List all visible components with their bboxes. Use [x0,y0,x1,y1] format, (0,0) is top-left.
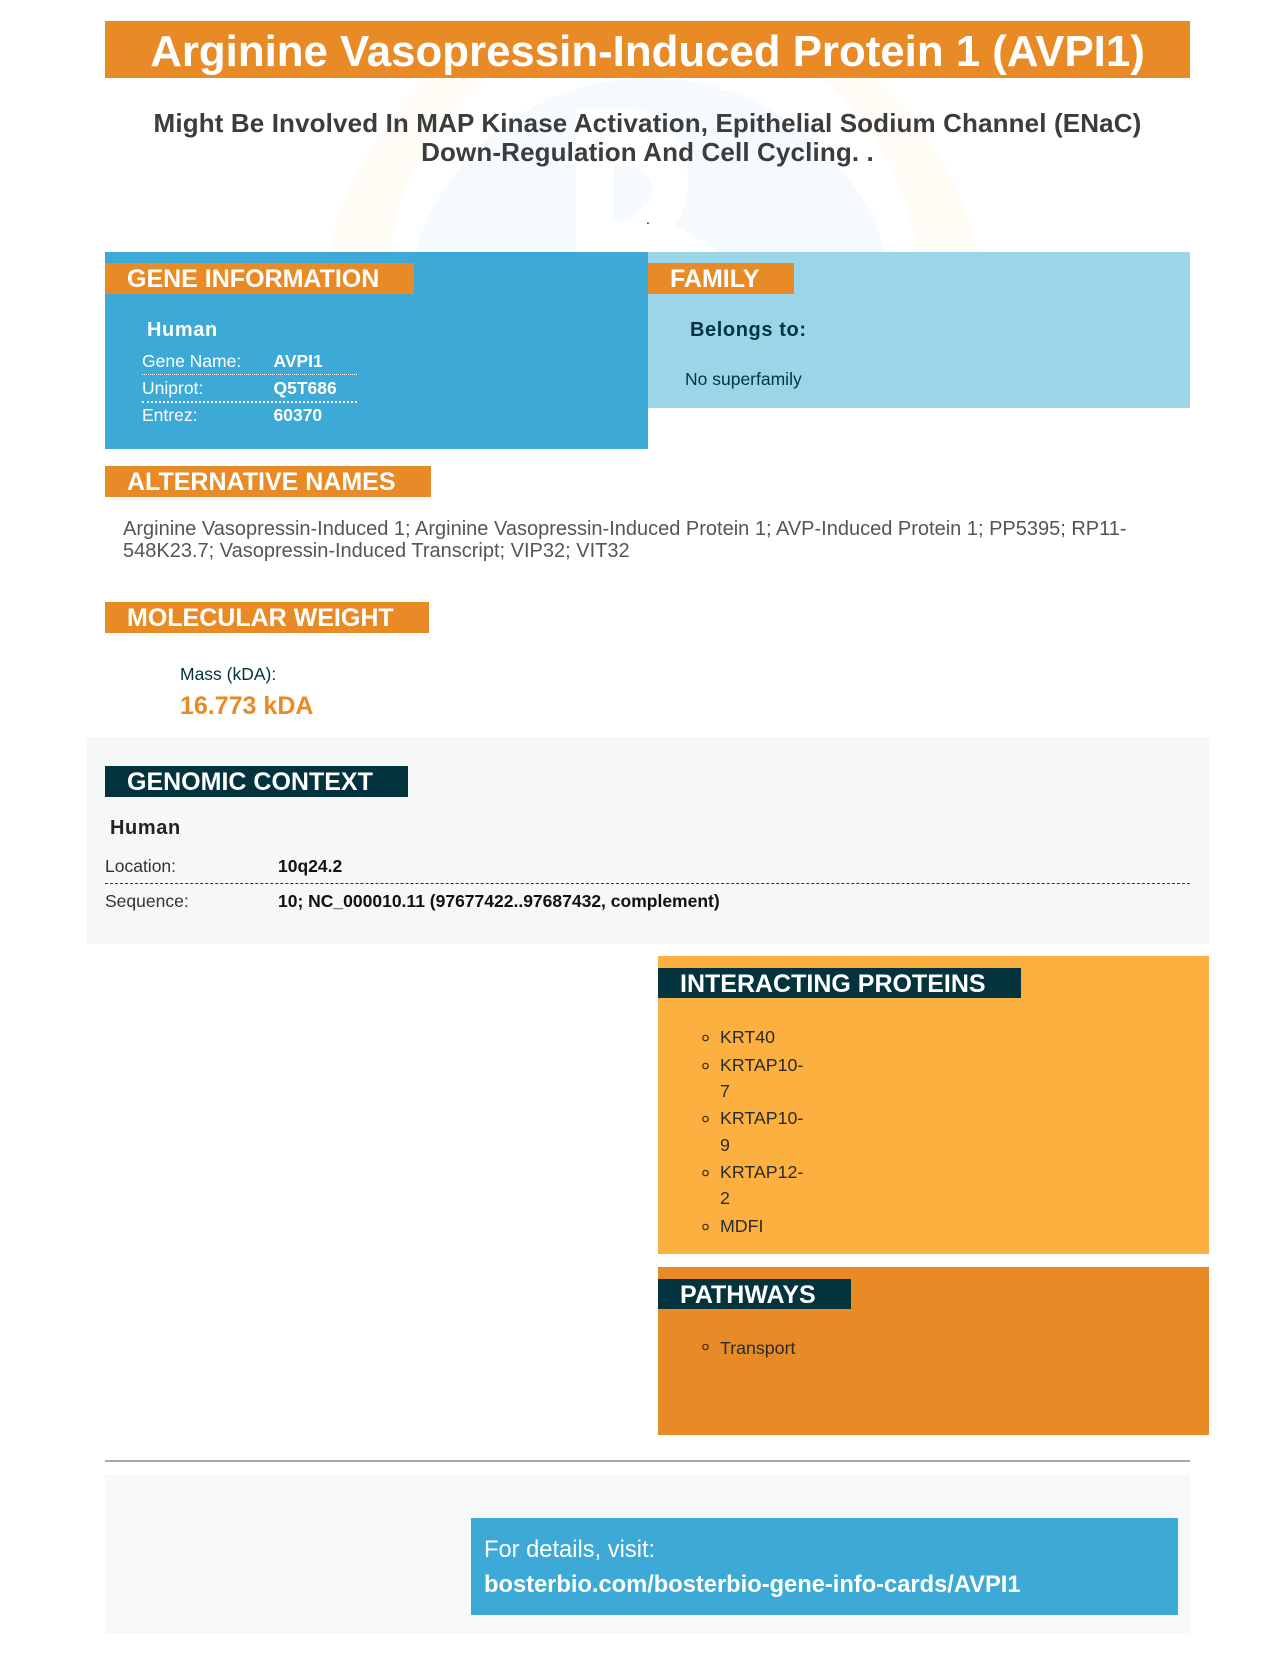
heading: pathways: PATHWAYS [680,1281,816,1309]
subtitle [154,108,1141,167]
callout: details link [471,1518,1178,1615]
protein names: KRTAP10- [720,1055,803,1075]
heading: family [648,263,794,294]
panel: interacting proteins [658,956,1209,1254]
row: location [105,854,1190,884]
mass label: Mass (kDA): [180,664,276,684]
row: uniprot: Uniprot: [142,378,203,398]
no superfamily: No superfamily [685,369,802,389]
belongs to label: Belongs to: [690,319,807,341]
mass value: 16.773 kDA [180,692,313,720]
species: human: Human [147,319,218,341]
row: gene name: Gene Name: [142,351,241,371]
subtitle: Might Be Involved In MAP Kinase Activation, Epithelial Sodium Channel (ENaC) [154,108,1141,138]
protein names: KRTAP12- [720,1162,803,1182]
row: uniprot [142,376,357,403]
protein names: KRT40 [720,1027,775,1047]
alternative names text: 548K23.7; Vasopressin-Induced Transcript; VIP32; VIT32 [123,540,630,562]
watermark logo [328,78,978,252]
panel: pathways [658,1267,1209,1435]
callout label: For details, visit: [484,1537,655,1563]
pathway name: Transport [720,1338,795,1358]
protein names: 7 [720,1081,730,1101]
heading: alternative names: ALTERNATIVE NAMES [127,468,396,496]
row: entrez: Entrez: [142,405,197,425]
row: location: 10q24.2 [278,856,342,876]
row: gene name: AVPI1 [274,351,323,371]
divider [105,1460,1190,1462]
heading: family: FAMILY [670,265,759,293]
row: entrez: 60370 [274,405,322,425]
species: human: Human [110,817,181,839]
heading: interacting proteins: INTERACTING PROTEINS [680,970,986,998]
protein names: 9 [720,1135,730,1155]
panel: genomic context [87,737,1209,944]
dot: . [646,211,650,227]
protein names: MDFI [720,1216,763,1236]
panel: family [648,252,1190,408]
heading: molecular weight: MOLECULAR WEIGHT [127,604,394,632]
heading: gene information: GENE INFORMATION [127,265,379,293]
pathway bullet [702,1344,709,1350]
heading: pathways [658,1279,851,1309]
protein names: 2 [720,1188,730,1208]
callout url: bosterbio.com/bosterbio-gene-info-cards/AVPI1 [484,1572,1021,1598]
title banner: Arginine Vasopressin-Induced Protein 1 (AVPI1) [150,27,1145,76]
row: uniprot: Q5T686 [274,378,337,398]
protein names: KRTAP10- [720,1108,803,1128]
panel: gene information [105,252,648,449]
row: location: Location: [105,856,176,876]
heading: genomic context: GENOMIC CONTEXT [127,768,373,796]
row: gene name [142,349,357,375]
alternative names text [123,518,1127,562]
panel: footer [105,1475,1190,1633]
alternative names text: Arginine Vasopressin-Induced 1; Arginine Vasopressin-Induced Protein 1; AVP-Induced Protein 1; PP5395; RP11- [123,518,1127,540]
protein names [720,1027,803,1236]
row: sequence: Sequence: [105,891,189,911]
row: entrez [142,405,322,425]
row: sequence: 10; NC_000010.11 (97677422..97687432, complement) [278,891,720,911]
protein list bullets [702,1034,709,1230]
subtitle: Down-Regulation And Cell Cycling. . [421,137,874,167]
